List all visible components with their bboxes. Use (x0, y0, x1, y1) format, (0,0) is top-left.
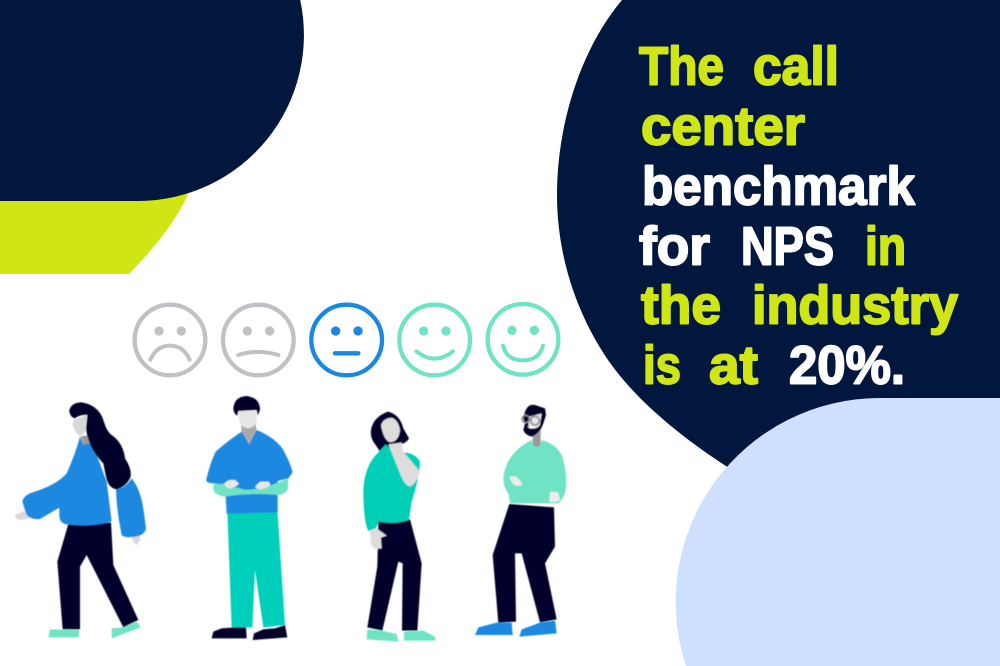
headline: the (641, 276, 721, 336)
navy shape top left (0, 0, 304, 201)
headline: at (709, 336, 758, 396)
headline: is (643, 336, 681, 396)
icon: very unhappy face (135, 305, 205, 375)
headline: benchmark (642, 156, 916, 216)
headline (639, 36, 958, 396)
icon: happy face (399, 305, 470, 375)
figure: man with crossed arms (206, 396, 293, 640)
headline: industry (752, 276, 958, 336)
headline: for (639, 216, 710, 276)
headline: The (639, 36, 724, 96)
figure: man with glasses and beard (475, 405, 566, 637)
headline: NPS (741, 216, 834, 276)
headline: 20%. (789, 336, 905, 396)
headline: call (753, 36, 839, 96)
headline: center (641, 96, 805, 156)
icon: unhappy face (223, 305, 294, 375)
icon: neutral face (311, 305, 382, 375)
people illustrations (15, 396, 566, 642)
navy circle right (557, 0, 1000, 470)
figure: walking woman with long hair (15, 402, 146, 638)
light blue shape bottom right (676, 398, 1000, 666)
figure: thinking woman (363, 412, 436, 642)
icon: very happy face (488, 304, 558, 375)
lime shape top left (0, 190, 190, 274)
rating faces row (135, 304, 558, 375)
headline: in (865, 216, 906, 276)
